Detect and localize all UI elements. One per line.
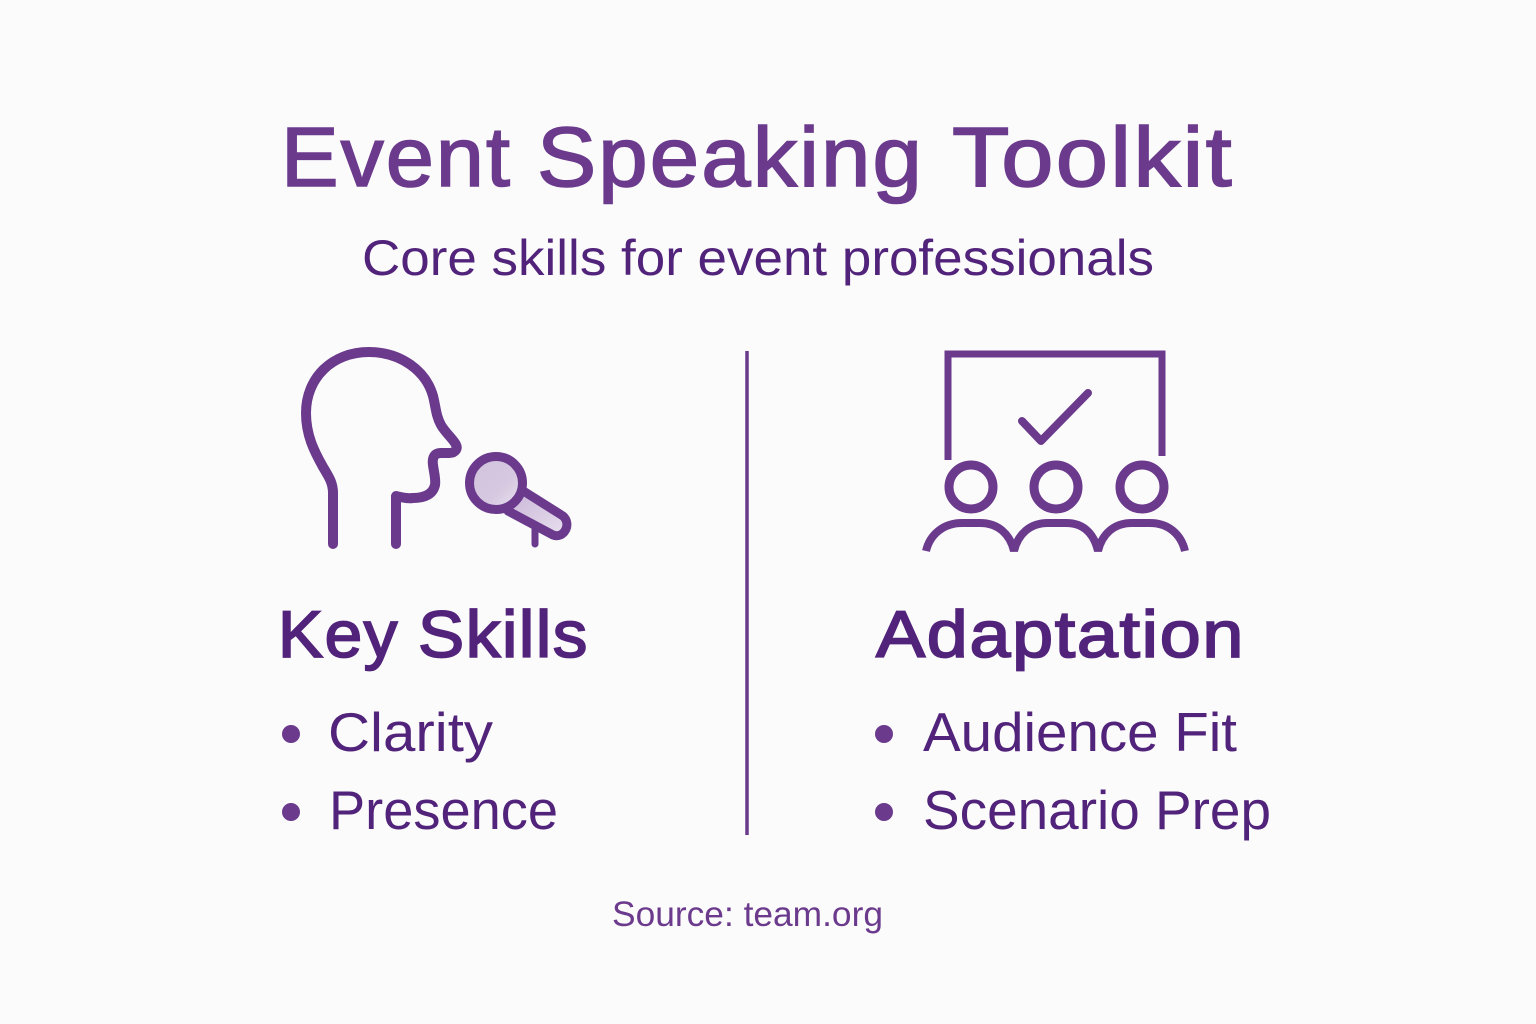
list: adaptation bbox=[875, 701, 1271, 841]
heading: Key Skills: Key bbox=[278, 597, 399, 671]
microphone handle bbox=[508, 492, 567, 536]
title: Event bbox=[281, 110, 512, 204]
checkmark bbox=[1022, 393, 1088, 441]
presentation screen bbox=[948, 354, 1162, 460]
icon: audience and screen with checkmark bbox=[926, 354, 1185, 551]
bullet bbox=[282, 725, 300, 743]
title bbox=[281, 110, 1234, 204]
title: Speaking bbox=[537, 110, 924, 204]
bullet bbox=[875, 725, 893, 743]
list: key skills bbox=[282, 701, 558, 841]
heading: Key Skills bbox=[278, 597, 589, 671]
bullet bbox=[875, 803, 893, 821]
source note: Source: team.org bbox=[612, 895, 883, 934]
subtitle: Core skills for event professionals bbox=[362, 230, 1154, 286]
item: Clarity: Clarity bbox=[328, 701, 494, 763]
heading: Adaptation: Adaptation bbox=[876, 597, 1245, 671]
item: Audience Fit: Audience Fit bbox=[923, 701, 1237, 763]
microphone head bbox=[470, 456, 522, 510]
divider bbox=[745, 351, 749, 835]
title: Toolkit bbox=[952, 110, 1234, 204]
bullet bbox=[282, 803, 300, 821]
item: Scenario Prep: Scenario Prep bbox=[923, 779, 1271, 841]
item: Presence: Presence bbox=[329, 779, 558, 841]
microphone stand bbox=[532, 526, 538, 544]
heading: Key Skills: Skills bbox=[418, 597, 589, 671]
audience member shoulders bbox=[926, 523, 1185, 551]
audience member heads bbox=[949, 465, 1164, 509]
icon: speaker head with microphone bbox=[306, 352, 567, 544]
head profile bbox=[306, 352, 457, 544]
microphone bbox=[470, 456, 567, 544]
